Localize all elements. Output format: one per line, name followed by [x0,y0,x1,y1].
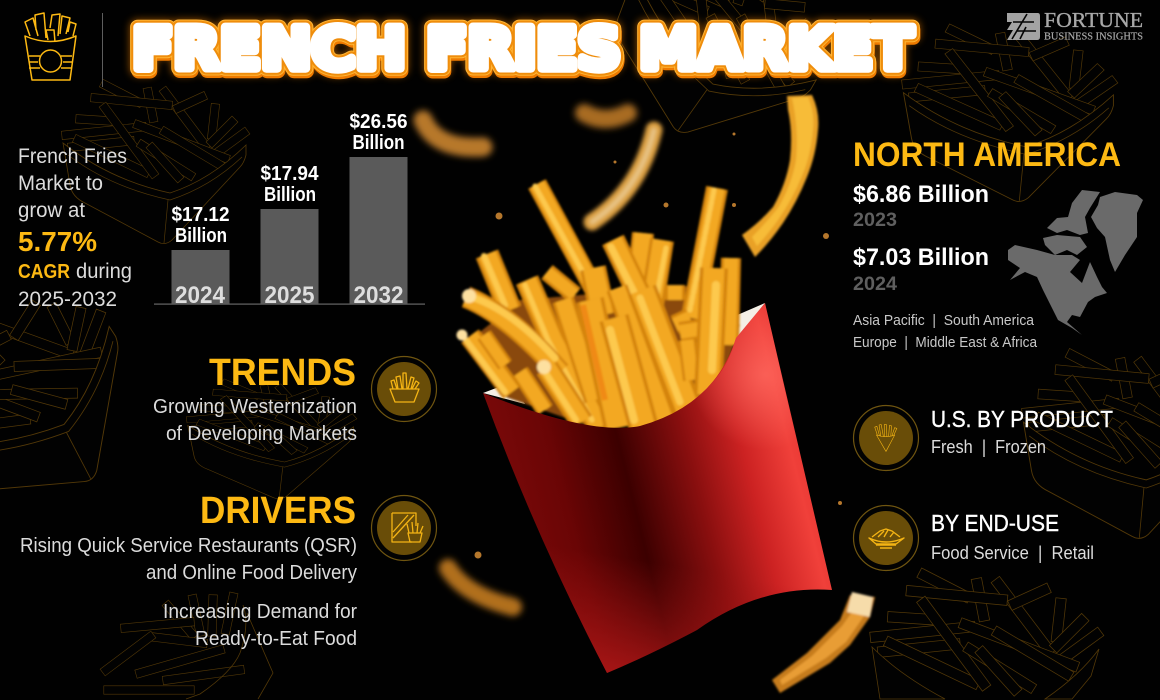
text block: CAGR statement: grow at [18,199,85,222]
bottom-right tray, drawn to stay inside the frame [872,575,1099,699]
title: FRIES [427,20,622,86]
bar 2032: Billion [352,132,404,154]
bar 2032 [350,111,408,309]
panel: trends: Growing Westernization [153,396,357,418]
logo: Fortune Business Insights [1007,8,1143,42]
bar 2025: 2025 [264,282,314,309]
title: MARKET [640,20,914,86]
text block: CAGR statement: during [76,260,132,283]
title: MARKET [639,17,913,83]
header divider [102,13,103,87]
text block: CAGR statement: French Fries [18,145,127,168]
title: FRENCH [132,17,406,83]
title: FRIES [426,17,621,83]
bar 2024: $17.12 [172,204,230,226]
photo: curved flying fry [742,95,818,257]
title: FRIES [426,17,621,83]
title: FRIES [426,17,621,83]
logo: Fortune Business Insights: BUSINESS INSIGHTS [1044,32,1143,42]
text block: CAGR statement: 5.77% [18,226,97,257]
panel: North America: NORTH AMERICA [853,136,1121,174]
panel: North America: $6.86 Billion [853,181,989,208]
title: FRENCH [133,20,407,86]
title: MARKET [639,17,913,83]
text block: CAGR statement: CAGR [18,261,70,283]
panel: drivers: Rising Quick Service Restaurants (QSR) [20,535,357,557]
photo: blurred flying fries [423,113,654,607]
panel: North America: Asia Pacific | South America [853,313,1035,329]
panel: U.S. by product: Fresh | Frozen [931,437,1046,457]
panel: trends: of Developing Markets [166,423,357,445]
map: North America [1008,190,1143,335]
icon: delivery phone and fries [372,496,436,560]
photo: box interior [483,303,765,404]
photo: falling fry at bottom [772,592,875,693]
panel: U.S. by product: U.S. BY PRODUCT [931,406,1113,432]
panel: by end-use: Food Service | Retail [931,543,1094,563]
title: FRENCH [132,17,406,83]
photo: crumbs [474,132,842,558]
panel: U.S. by product [854,406,1113,470]
bar 2025: $17.94 [260,163,319,185]
bar 2025: Billion [264,184,316,206]
logo: Fortune Business Insights: FORTUNE [1044,8,1143,32]
panel: by end-use [854,506,1094,570]
title: FRENCH [132,17,406,83]
panel: North America [853,136,1143,351]
text block: CAGR statement: 2025-2032 [18,288,117,311]
photo: red fries box [483,303,832,673]
title: MARKET [639,17,913,83]
bar 2024: 2024 [175,282,226,309]
bar 2032: 2032 [354,282,404,309]
panel: by end-use: BY END-USE [931,510,1059,536]
panel: North America: 2023 [853,210,897,231]
bar 2024 [172,204,230,309]
panel: drivers: Ready-to-Eat Food [195,628,357,650]
bar 2032: $26.56 [350,111,408,133]
panel: drivers: and Online Food Delivery [146,562,357,584]
text block: CAGR statement: Market to [18,172,103,195]
photo: fries in the box [456,184,740,430]
bar 2025 [260,163,319,309]
bar 2024: Billion [175,225,227,247]
bar chart: market size [154,111,425,309]
panel: trends: TRENDS [209,352,356,394]
text block: CAGR statement [18,145,132,311]
header icon: fries box [25,13,76,80]
panel: trends [153,352,436,445]
panel: drivers: Increasing Demand for [163,601,357,623]
panel: North America: 2024 [853,274,897,295]
panel: North America: $7.03 Billion [853,244,989,271]
panel: North America: Europe | Middle East & Africa [853,335,1038,351]
panel: drivers: DRIVERS [200,490,356,532]
title: MARKET [639,17,913,83]
icon: fries plate [854,506,918,570]
title: FRENCH [132,17,406,83]
title [132,17,914,86]
panel: drivers [20,490,436,650]
title: FRIES [426,17,621,83]
icon: fries bowl [372,356,436,422]
bottom-left tray, drawn to stay inside the frame [106,597,273,699]
icon: fries cone [854,406,918,470]
